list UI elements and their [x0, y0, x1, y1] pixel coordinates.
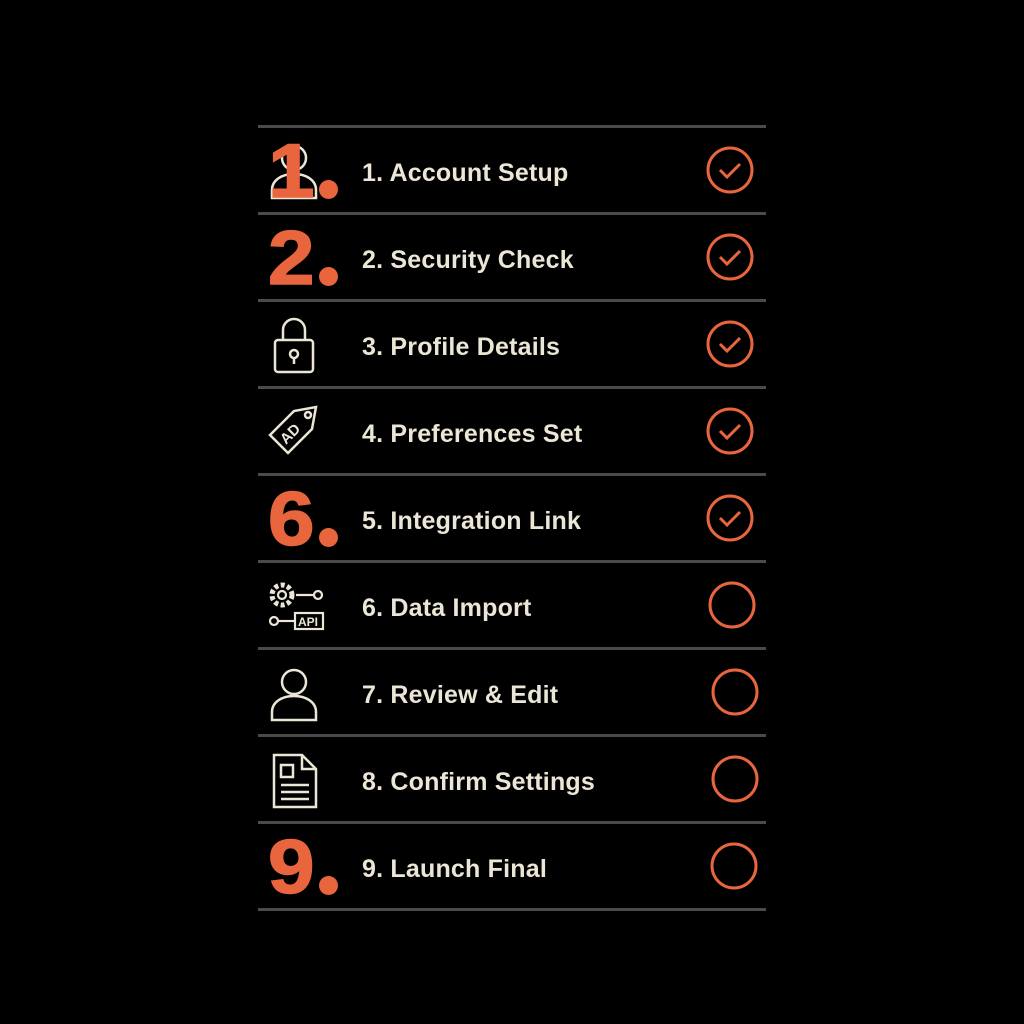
- big number 2: [268, 216, 338, 301]
- row 7: review & edit: [270, 668, 758, 722]
- row 9: launch final: [268, 825, 758, 910]
- row 4: preferences set: [268, 406, 754, 455]
- icon: AD tag: [268, 406, 318, 455]
- circle pending: [712, 756, 758, 802]
- icon: document: [272, 754, 318, 808]
- check done: [706, 494, 754, 542]
- big number 6: [268, 477, 338, 562]
- icon: AD tag: AD: [277, 420, 304, 448]
- label: 5. Integration Link: [362, 507, 581, 535]
- label: 7. Review & Edit: [362, 681, 558, 709]
- row 3: profile details: [274, 318, 754, 374]
- label: 8. Confirm Settings: [362, 768, 595, 796]
- check done: [706, 320, 754, 368]
- row 6: data import: [268, 582, 756, 630]
- big number 9: [268, 825, 338, 910]
- icon: gear API: API: [298, 615, 318, 629]
- icon: gear API: [268, 582, 324, 630]
- row 1: account setup: [268, 129, 754, 214]
- big number 1: 1: [268, 129, 315, 214]
- icon: user with number 1: [270, 146, 318, 200]
- icon: padlock: [274, 318, 314, 374]
- circle pending: [712, 668, 758, 716]
- circle pending: [710, 842, 758, 890]
- check done: [706, 234, 754, 280]
- big number 6: 6: [268, 477, 315, 562]
- row 2: security check: [268, 216, 754, 301]
- label: 6. Data Import: [362, 594, 532, 622]
- big number 1: [268, 129, 338, 214]
- big number 9: 9: [268, 825, 315, 910]
- icon: user: [270, 668, 318, 722]
- check done: [706, 408, 754, 454]
- label: 9. Launch Final: [362, 855, 547, 883]
- check done: [706, 146, 754, 194]
- row 8: confirm settings: [272, 754, 758, 808]
- label: 4. Preferences Set: [362, 420, 582, 448]
- label: 1. Account Setup: [362, 159, 568, 187]
- circle pending: [708, 582, 756, 628]
- big number 2: 2: [268, 216, 315, 301]
- label: 2. Security Check: [362, 246, 574, 274]
- row 5: integration link: [268, 477, 754, 562]
- label: 3. Profile Details: [362, 333, 560, 361]
